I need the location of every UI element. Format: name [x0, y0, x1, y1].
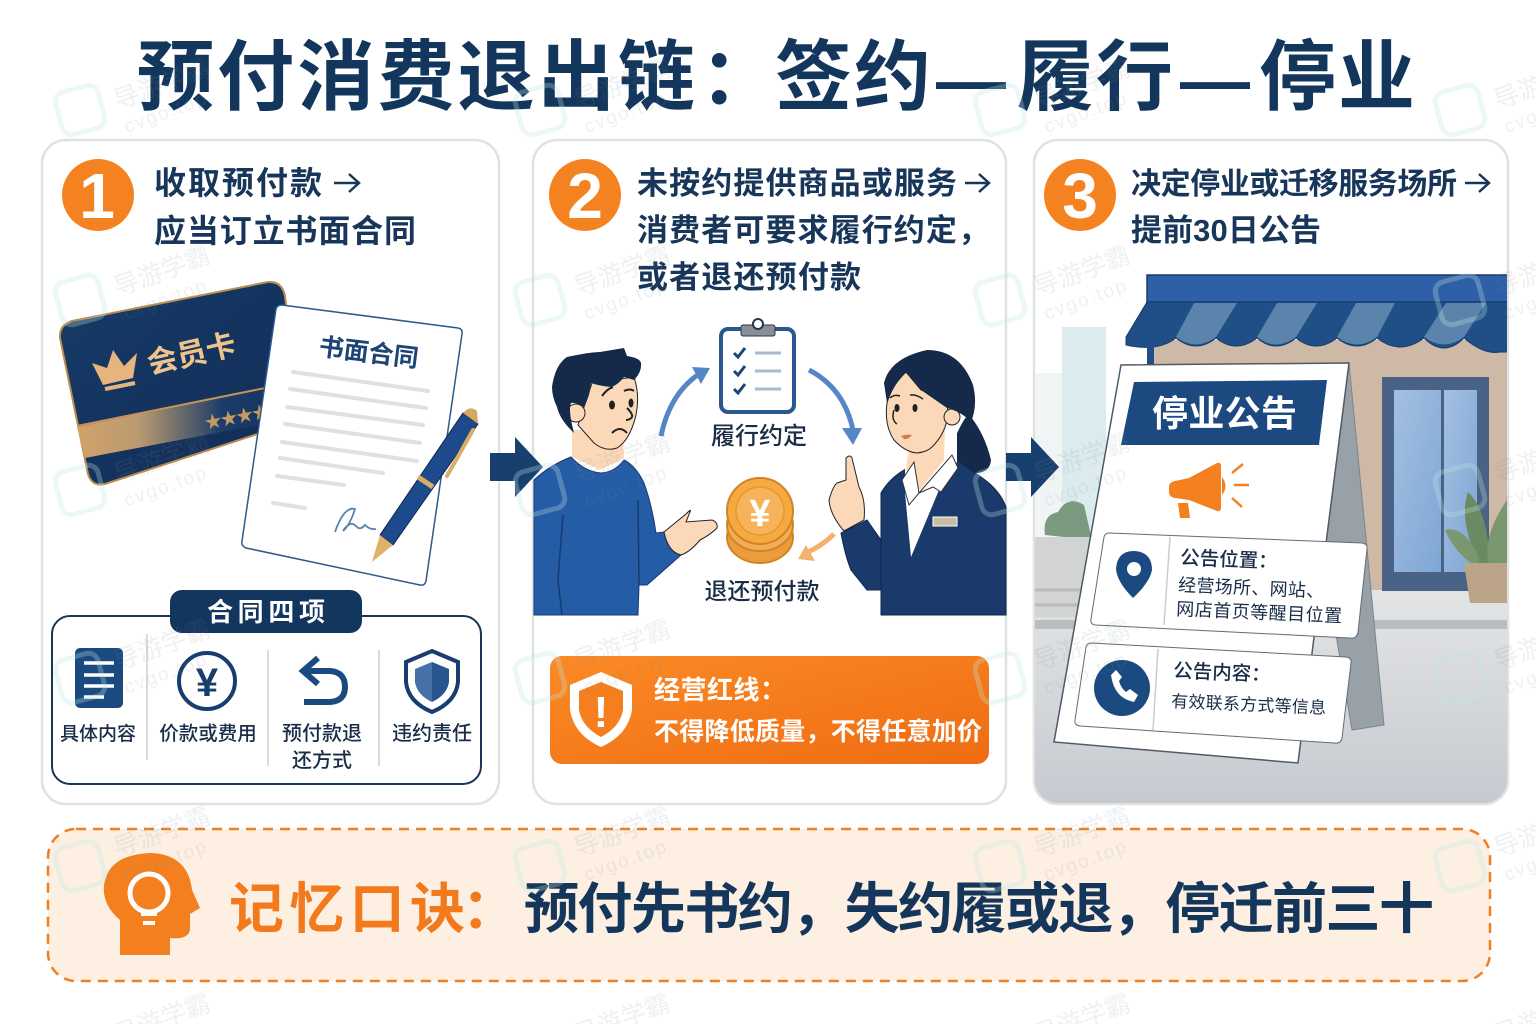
title: — [1180, 41, 1250, 119]
watermark logos [53, 83, 1487, 893]
item: price: 价款或费用 [159, 723, 257, 745]
step 2 badge [549, 159, 621, 232]
watermark: cvgo.top [1041, 462, 1131, 512]
icon: coins [727, 478, 793, 563]
arrow: refund [806, 534, 834, 553]
memory text: 记忆口诀 [229, 878, 465, 940]
title [137, 35, 1415, 121]
contract document [242, 305, 462, 585]
step 3 heading: 决定停业或迁移服务场所 [1131, 168, 1457, 201]
callout: red line: ! [594, 688, 608, 737]
arrow: step 1 to 2 [490, 437, 543, 497]
shop door [1382, 377, 1489, 591]
icon: megaphone [1169, 463, 1249, 518]
icon: head with lightbulb [104, 853, 200, 955]
icon: checklist [721, 319, 794, 412]
title: 预付消费退出链 [137, 35, 695, 121]
callout: red line: 不得降低质量，不得任意加价 [654, 717, 982, 746]
notice location card [1091, 533, 1367, 638]
notice location card: 公告位置： [1180, 547, 1278, 573]
contract items box [52, 590, 481, 784]
contract items label [170, 590, 362, 633]
arrow: step 1 heading [334, 174, 359, 192]
watermark: 导游学霸 [1030, 54, 1134, 115]
memory banner [48, 829, 1490, 981]
watermark: cvgo.top [121, 462, 211, 512]
arrow: step 2 to 3 [1006, 437, 1059, 497]
step 2 badge: 2 [567, 160, 603, 232]
label: refund: 退还预付款 [704, 578, 820, 604]
step 3 heading [1131, 168, 1457, 248]
watermark: cvgo.top [1041, 836, 1131, 886]
awning [1126, 275, 1508, 365]
icon: pen [372, 408, 478, 562]
item: details: 具体内容 [60, 723, 136, 745]
step 1 badge: 1 [79, 160, 115, 232]
notice contact card: 公告内容： [1173, 660, 1271, 686]
watermark: cvgo.top [581, 275, 671, 325]
watermark: cvgo.top [581, 836, 671, 886]
notice contact card [1075, 643, 1351, 743]
title: — [936, 41, 1006, 119]
panel: step 1 [42, 140, 499, 804]
panel: step 2 [533, 140, 1006, 804]
watermark: cvgo.top [581, 649, 671, 699]
item: details [60, 648, 136, 745]
staff figure [829, 350, 1006, 615]
step 2 heading [637, 166, 989, 295]
notice sign: 停业公告 [1152, 393, 1297, 434]
membership card: 会员卡 [144, 328, 239, 381]
step 2 heading: 消费者可要求履行约定， [637, 213, 989, 248]
contract document: 书面合同 [317, 333, 420, 373]
callout: red line: 经营红线： [654, 675, 786, 705]
membership card: ★★★★ [203, 402, 271, 433]
step 1 heading [154, 165, 416, 249]
notice location card: 网店首页等醒目位置 [1176, 599, 1343, 626]
step 1 badge [62, 159, 134, 232]
memory text: ： [462, 878, 517, 940]
step 2 heading: 未按约提供商品或服务 [637, 166, 957, 201]
arrow: to contract [661, 372, 702, 436]
icon: coins: ¥ [749, 493, 771, 535]
item: refund: 还方式 [292, 749, 352, 772]
watermark: cvgo.top [1041, 649, 1131, 699]
item: price: ¥ [196, 661, 219, 705]
potted plant [1445, 492, 1507, 603]
contract items label: 合同四项 [207, 597, 325, 627]
title: ： [700, 35, 777, 121]
watermark: 导游学霸 [570, 241, 674, 302]
notice location card: 经营场所、网站、 [1178, 575, 1325, 601]
panel: step 3 [1034, 140, 1508, 804]
watermark: 导游学霸 [110, 615, 214, 676]
step 1 heading: 收取预付款 [154, 165, 322, 201]
watermark: 导游学霸 [1030, 615, 1134, 676]
watermark: 导游学霸 [1030, 241, 1134, 302]
item: liability: 违约责任 [392, 722, 472, 745]
notice sign [1054, 363, 1384, 763]
storefront scene [1035, 275, 1508, 804]
watermark: 导游学霸 [570, 54, 674, 115]
watermark: cvgo.top [121, 275, 211, 325]
watermark: 导游学霸 [570, 802, 674, 863]
watermark: 导游学霸 [570, 428, 674, 489]
watermark: 导游学霸 [110, 54, 214, 115]
watermark: cvgo.top [581, 462, 671, 512]
arrow: to staff [809, 370, 853, 430]
watermark: 导游学霸 [110, 428, 214, 489]
item: price [159, 653, 257, 745]
watermark: cvgo.top [581, 88, 671, 138]
title: 停业 [1259, 35, 1415, 121]
watermark: 导游学霸 [1030, 428, 1134, 489]
arrow: step 2 heading [965, 174, 989, 192]
title: 履行 [1017, 35, 1173, 121]
watermark: 导游学霸 [110, 802, 214, 863]
item: liability [392, 651, 472, 745]
label: perform: 履行约定 [711, 423, 807, 450]
title: 签约 [775, 35, 931, 121]
membership card [60, 282, 300, 485]
watermark: 导游学霸 [1030, 802, 1134, 863]
step 2 heading: 或者退还预付款 [637, 260, 861, 295]
consumer figure [534, 348, 717, 615]
notice contact card: 有效联系方式等信息 [1171, 692, 1327, 718]
arrow: step 3 heading [1465, 174, 1489, 192]
watermark: 导游学霸 [110, 241, 214, 302]
callout: red line [550, 656, 989, 764]
watermark: cvgo.top [121, 88, 211, 138]
step 3 badge: 3 [1062, 160, 1098, 232]
item: refund [282, 658, 362, 772]
watermark: cvgo.top [121, 836, 211, 886]
watermark: cvgo.top [1041, 88, 1131, 138]
watermark: 导游学霸 [570, 615, 674, 676]
step 3 badge [1044, 159, 1116, 232]
memory text: 预付先书约，失约履或退，停迁前三十 [524, 878, 1434, 940]
item: refund: 预付款退 [282, 722, 362, 745]
step 1 heading: 应当订立书面合同 [154, 213, 416, 249]
watermark: cvgo.top [1041, 275, 1131, 325]
step 3 heading: 提前30日公告 [1131, 213, 1321, 248]
watermark: cvgo.top [121, 649, 211, 699]
